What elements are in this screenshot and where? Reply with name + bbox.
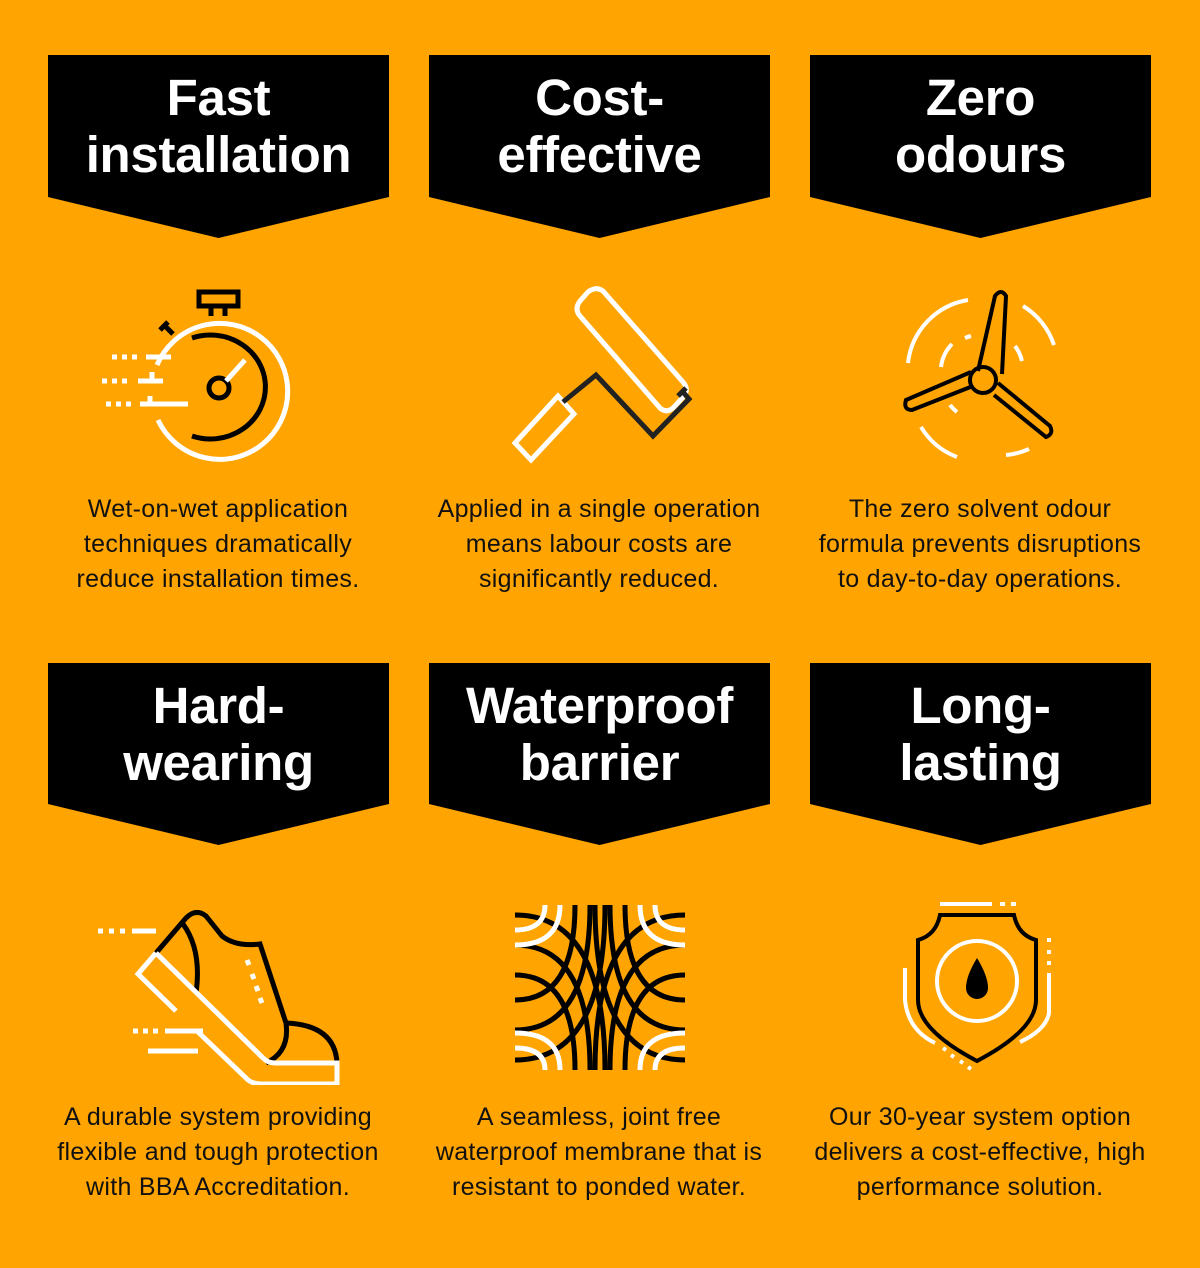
text: zero odours: The zero solvent odour <box>849 495 1111 523</box>
banner: Fast installation: installation <box>86 126 351 183</box>
text: cost-effective <box>438 495 760 593</box>
text: zero odours <box>819 495 1141 593</box>
text: fast installation: techniques dramatically <box>84 530 352 558</box>
text: fast installation: reduce installation times. <box>77 565 359 593</box>
banner: Long-lasting: lasting <box>899 734 1062 791</box>
banner: Cost-effective <box>429 55 770 238</box>
banner: Waterproof barrier <box>429 663 770 845</box>
banner: Fast installation: Fast <box>167 69 270 126</box>
icon: shield with drop <box>903 902 1051 1071</box>
text: waterproof barrier <box>436 1103 762 1201</box>
banner: Hard-wearing <box>48 663 389 845</box>
text: fast installation <box>77 495 359 593</box>
text: waterproof barrier: waterproof membrane that is <box>436 1138 762 1166</box>
icon: waterproof mesh <box>515 905 685 1070</box>
text: cost-effective: means labour costs are <box>466 530 732 558</box>
text: hard-wearing: A durable system providing <box>64 1103 372 1131</box>
text: long-lasting: Our 30-year system option <box>829 1103 1131 1131</box>
text: fast installation: Wet-on-wet application <box>88 495 348 523</box>
text: long-lasting: performance solution. <box>857 1173 1103 1201</box>
icon: stopwatch <box>102 290 290 462</box>
banner: Cost-effective: Cost- <box>535 69 664 126</box>
banner: Cost-effective: effective <box>497 126 702 183</box>
icon: fan <box>903 290 1056 459</box>
banner: Long-lasting: Long- <box>910 677 1051 734</box>
banner: Zero odours: Zero <box>926 69 1035 126</box>
banner: Waterproof barrier: Waterproof <box>466 677 733 734</box>
text: zero odours: to day-to-day operations. <box>838 565 1122 593</box>
text: hard-wearing: with BBA Accreditation. <box>86 1173 350 1201</box>
text: long-lasting: delivers a cost-effective, high <box>814 1138 1146 1166</box>
icon: shoe <box>98 910 340 1085</box>
text: hard-wearing <box>57 1103 379 1201</box>
banner: Waterproof barrier: barrier <box>520 734 679 791</box>
banner: Zero odours <box>810 55 1151 238</box>
text: hard-wearing: flexible and tough protection <box>57 1138 379 1166</box>
text: cost-effective: Applied in a single operation <box>438 495 760 523</box>
banner: Zero odours: odours <box>895 126 1066 183</box>
text: long-lasting <box>814 1103 1146 1201</box>
banner: Long-lasting <box>810 663 1151 845</box>
icon: paint roller <box>512 286 692 464</box>
banner: Hard-wearing: Hard- <box>153 677 284 734</box>
text: waterproof barrier: A seamless, joint free <box>477 1103 721 1131</box>
text: cost-effective: significantly reduced. <box>479 565 719 593</box>
banner: Hard-wearing: wearing <box>123 734 314 791</box>
banner: Fast installation <box>48 55 389 238</box>
text: zero odours: formula prevents disruptions <box>819 530 1141 558</box>
text: waterproof barrier: resistant to ponded water. <box>452 1173 746 1201</box>
